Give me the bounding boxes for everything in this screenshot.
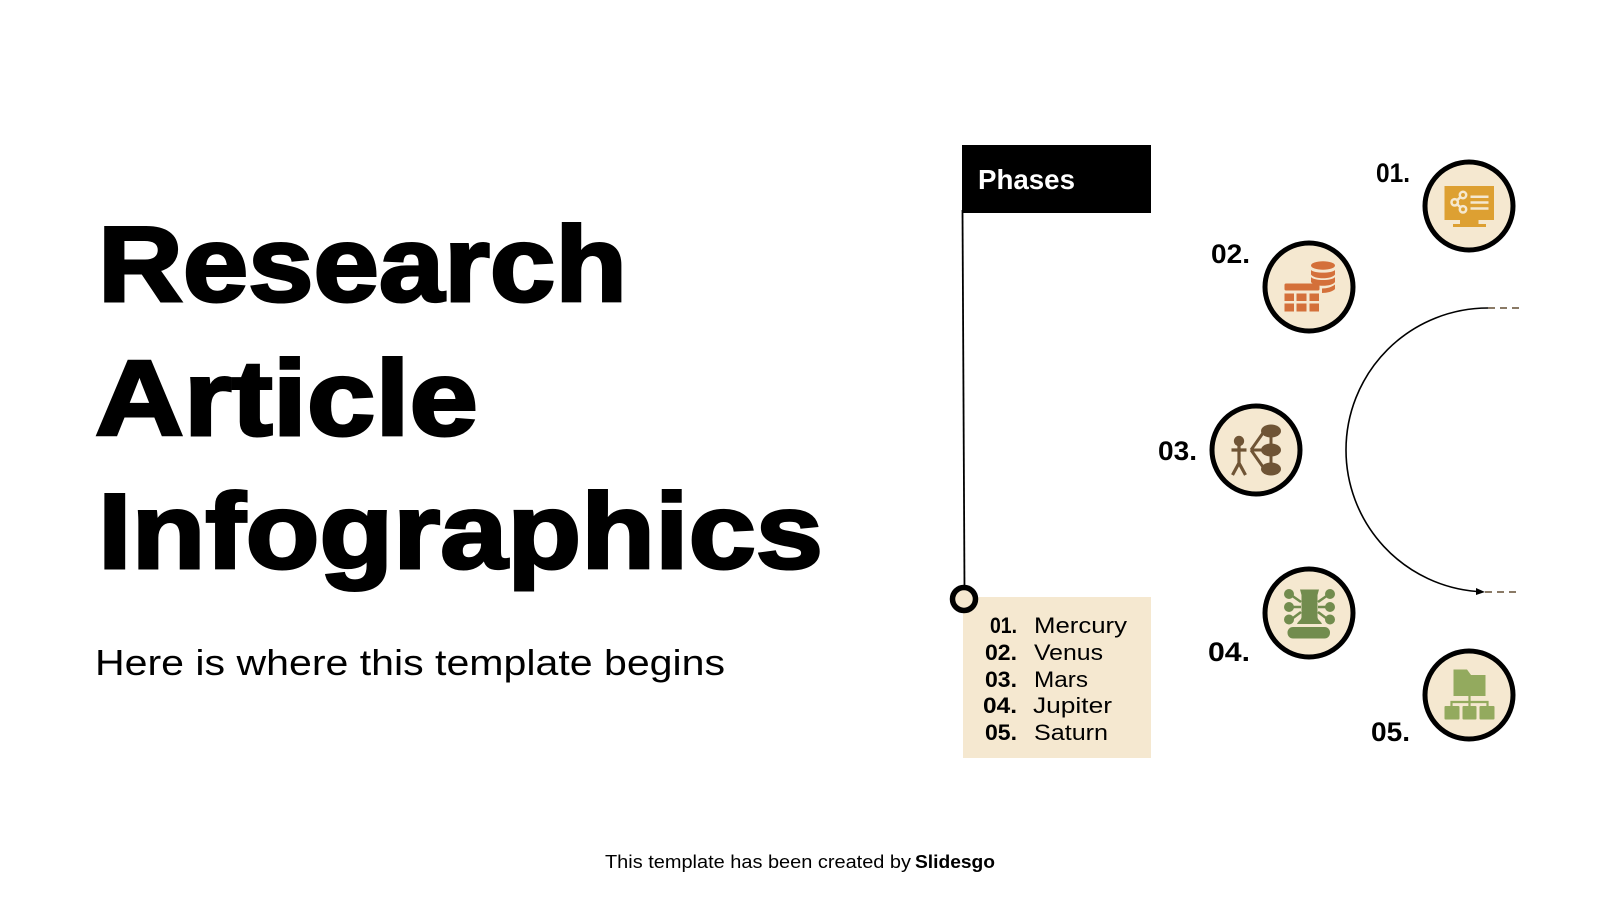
phase 05 number: 05. <box>1371 717 1410 747</box>
icon: person and decision tree <box>1212 406 1300 494</box>
panel: phases list: Mars <box>1034 667 1088 692</box>
footer credit: Slidesgo <box>915 851 995 872</box>
phase 02 number: 02. <box>1211 239 1250 269</box>
icon: chip with circuits <box>1265 569 1353 657</box>
curved arrow <box>1346 308 1519 595</box>
title: Research <box>98 204 627 324</box>
icon: database and table <box>1265 243 1353 331</box>
flag pole marker <box>952 588 976 610</box>
flag pole line <box>962 210 964 590</box>
footer credit: This template has been created by <box>605 851 912 872</box>
panel: phases header: Phases <box>978 164 1075 195</box>
panel: phases list: 01. <box>990 613 1017 638</box>
panel: phases list <box>963 597 1151 758</box>
icon: folder hierarchy <box>1425 651 1513 739</box>
phase 03 number: 03. <box>1158 436 1197 466</box>
panel: phases list: Saturn <box>1034 720 1108 745</box>
title: Article <box>95 338 478 458</box>
panel: phases list: Venus <box>1034 640 1103 665</box>
panel: phases list: 04. <box>983 693 1017 718</box>
panel: phases list: Mercury <box>1034 613 1128 638</box>
title <box>95 204 823 591</box>
phase 04 number: 04. <box>1208 637 1250 667</box>
panel: phases header <box>962 145 1151 213</box>
icon: monitor with share symbol <box>1425 162 1513 250</box>
panel: phases list: 05. <box>985 720 1017 745</box>
title: Infographics <box>98 471 823 591</box>
subtitle: Here is where this template begins <box>95 642 725 683</box>
panel: phases list: Jupiter <box>1033 693 1113 718</box>
phase 01 number: 01. <box>1376 158 1410 188</box>
panel: phases list: 02. <box>985 640 1017 665</box>
panel: phases list: 03. <box>985 667 1017 692</box>
